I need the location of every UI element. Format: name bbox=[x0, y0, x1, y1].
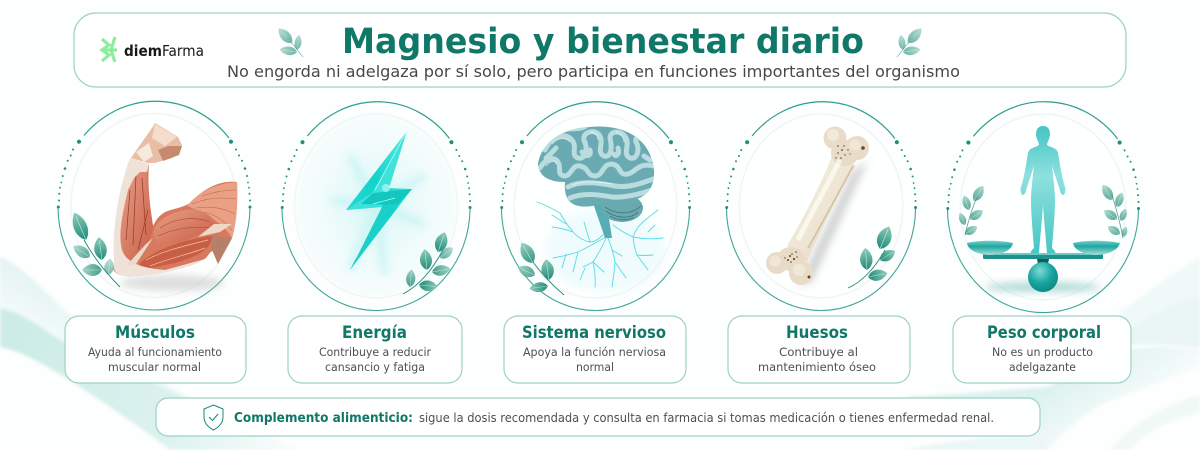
card: energía: Energía bbox=[342, 323, 407, 342]
leaf sprig bbox=[848, 224, 898, 288]
card: peso corporal: adelgazante bbox=[1009, 360, 1076, 374]
ring decoration 4 bbox=[725, 102, 917, 310]
card: energía: cansancio y fatiga bbox=[325, 360, 425, 374]
card: energía bbox=[288, 316, 462, 383]
card: sistema nervioso: Apoya la función nerviosa bbox=[523, 345, 666, 359]
icon: shield check bbox=[204, 405, 223, 430]
leaf sprig left bbox=[957, 184, 987, 237]
card: peso corporal: No es un producto bbox=[992, 345, 1093, 359]
logo: diemFarma: diemFarma bbox=[124, 42, 204, 60]
panel: huesos bbox=[725, 102, 917, 383]
panel: sistema nervioso bbox=[500, 102, 691, 383]
subtitle: No engorda ni adelgaza por sí solo, pero participa en funciones importantes del organismo bbox=[227, 62, 960, 81]
leaf sprig bbox=[68, 210, 120, 287]
icon: lightning bolt bbox=[295, 115, 457, 297]
card: huesos: Huesos bbox=[786, 323, 848, 342]
panel: peso corporal bbox=[946, 102, 1140, 383]
disclaimer text: sigue la dosis recomendada y consulta en farmacia si tomas medicación o tienes enfermedad renal. bbox=[419, 411, 994, 425]
card: energía: Contribuye a reducir bbox=[319, 345, 431, 359]
icon: person on balance scale bbox=[967, 126, 1120, 292]
ring decoration 5 bbox=[946, 102, 1140, 313]
disclaimer text: Complemento alimenticio: bbox=[234, 411, 413, 426]
card: peso corporal: Peso corporal bbox=[987, 323, 1101, 342]
card: sistema nervioso bbox=[504, 316, 686, 383]
card: músculos: Músculos bbox=[115, 323, 195, 342]
card: sistema nervioso: Sistema nervioso bbox=[522, 323, 666, 342]
leaf sprig bbox=[516, 240, 564, 295]
header panel bbox=[74, 13, 1126, 87]
card: huesos bbox=[728, 316, 910, 383]
card: sistema nervioso: normal bbox=[576, 360, 614, 374]
leaf sprig bbox=[403, 230, 456, 294]
icon: femur bone bbox=[766, 126, 869, 285]
ring decoration 1 bbox=[57, 101, 252, 310]
card: músculos: Ayuda al funcionamiento bbox=[88, 345, 222, 359]
ring decoration 2 bbox=[281, 102, 472, 310]
card: músculos: muscular normal bbox=[108, 360, 201, 374]
card: peso corporal bbox=[953, 316, 1131, 383]
logo: diemFarma bbox=[101, 37, 204, 62]
card: huesos: mantenimiento óseo bbox=[758, 360, 876, 374]
icon: brain with nerves bbox=[535, 122, 665, 292]
icon: muscular arm bbox=[113, 123, 237, 291]
panel: energía bbox=[281, 102, 472, 383]
ring decoration 3 bbox=[500, 102, 691, 310]
title: Magnesio y bienestar diario bbox=[342, 22, 864, 62]
disclaimer bar bbox=[156, 398, 1040, 436]
card: huesos: Contribuye al bbox=[779, 345, 858, 359]
panel: músculos bbox=[57, 101, 252, 383]
leaf sprig right of title bbox=[897, 25, 925, 57]
card: músculos bbox=[65, 316, 246, 383]
leaf sprig left of title bbox=[275, 25, 303, 57]
leaf sprig right bbox=[1099, 183, 1129, 238]
